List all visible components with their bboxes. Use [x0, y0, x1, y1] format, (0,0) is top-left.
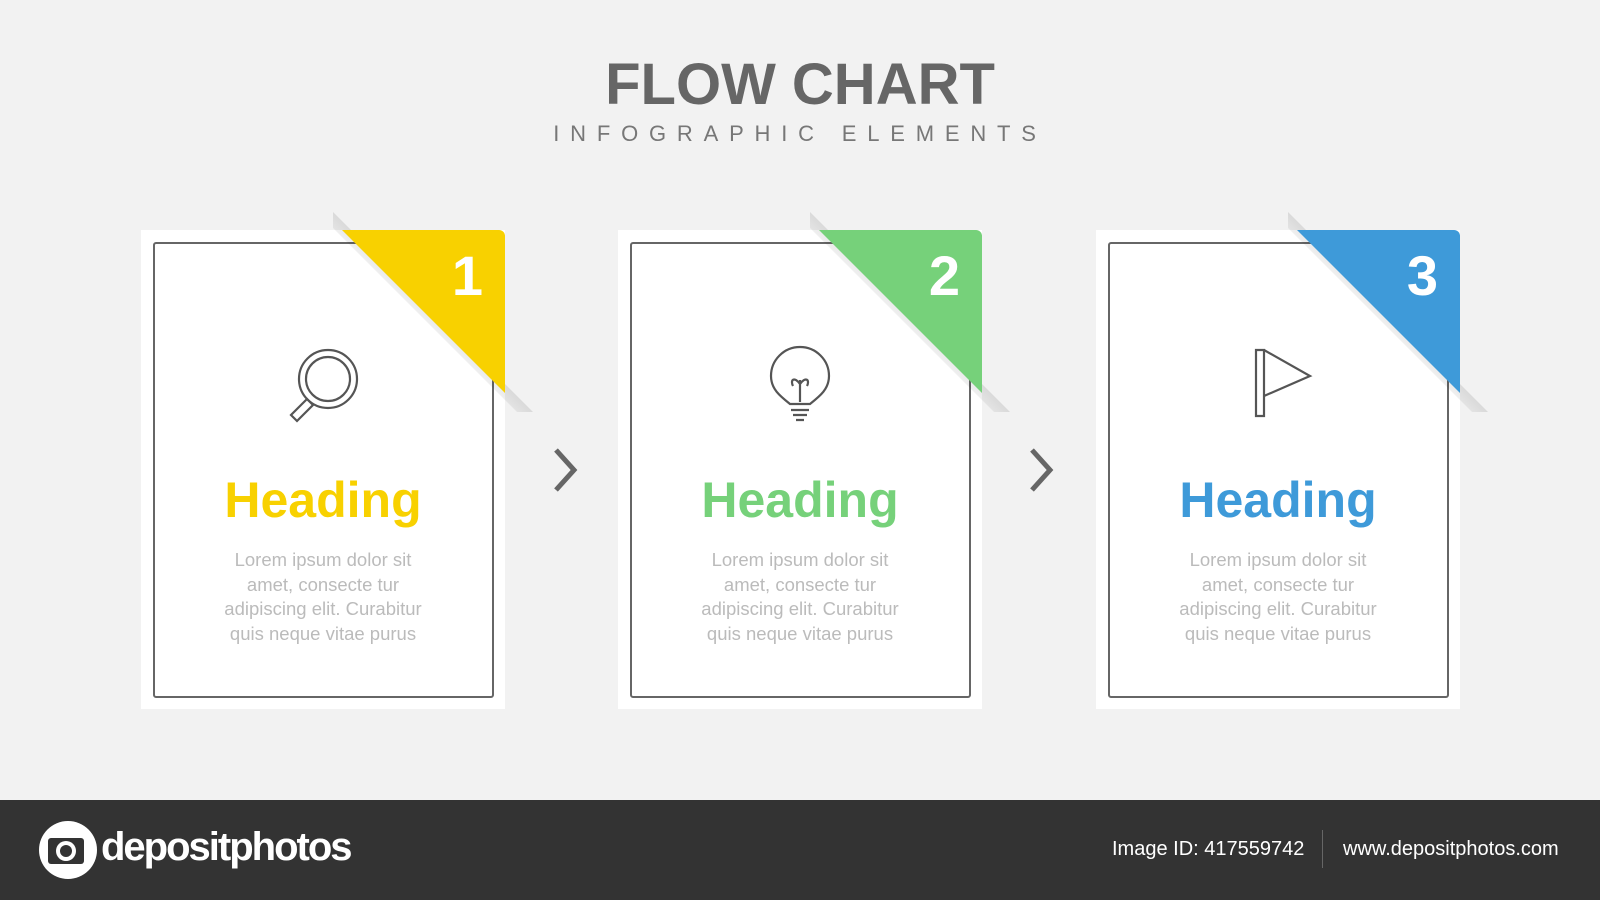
text 2: Lorem ipsum dolor sit	[712, 549, 888, 570]
text 2: adipiscing elit. Curabitur	[701, 598, 899, 619]
text 1: Lorem ipsum dolor sit	[235, 549, 411, 570]
icon: flag	[1254, 348, 1312, 418]
corner tab 3	[1297, 230, 1460, 393]
image id: Image ID: 417559742	[1112, 838, 1304, 860]
text 3	[1179, 549, 1377, 644]
panel: step 2	[618, 230, 982, 709]
panel: step 3	[1096, 230, 1460, 709]
icon: logo camera	[39, 821, 97, 879]
footer bar	[0, 800, 1600, 900]
text 3: Lorem ipsum dolor sit	[1190, 549, 1366, 570]
logo text: depositphotos	[101, 825, 351, 869]
heading 3: Heading	[1179, 472, 1377, 528]
corner tab 2	[819, 230, 982, 393]
number 2: 2	[929, 244, 960, 307]
text 1: adipiscing elit. Curabitur	[224, 598, 422, 619]
text 3: adipiscing elit. Curabitur	[1179, 598, 1377, 619]
number 1: 1	[452, 244, 483, 307]
text 2: quis neque vitae purus	[707, 623, 893, 644]
text 3: amet, consecte tur	[1202, 574, 1354, 595]
text 1: amet, consecte tur	[247, 574, 399, 595]
heading 2: Heading	[701, 472, 899, 528]
title: FLOW CHART	[605, 52, 995, 117]
panel: step 1	[141, 230, 505, 709]
number 3: 3	[1407, 244, 1438, 307]
icon: light bulb	[770, 346, 830, 422]
text 1	[224, 549, 422, 644]
text 2: amet, consecte tur	[724, 574, 876, 595]
heading 1: Heading	[224, 472, 422, 528]
text 3: quis neque vitae purus	[1185, 623, 1371, 644]
subtitle: INFOGRAPHIC ELEMENTS	[553, 121, 1047, 146]
text 2	[701, 549, 899, 644]
arrow 1	[554, 448, 578, 492]
url: www.depositphotos.com	[1343, 838, 1559, 860]
arrow 2	[1030, 448, 1054, 492]
corner tab 1	[342, 230, 505, 393]
icon: magnifier	[290, 348, 358, 422]
text 1: quis neque vitae purus	[230, 623, 416, 644]
